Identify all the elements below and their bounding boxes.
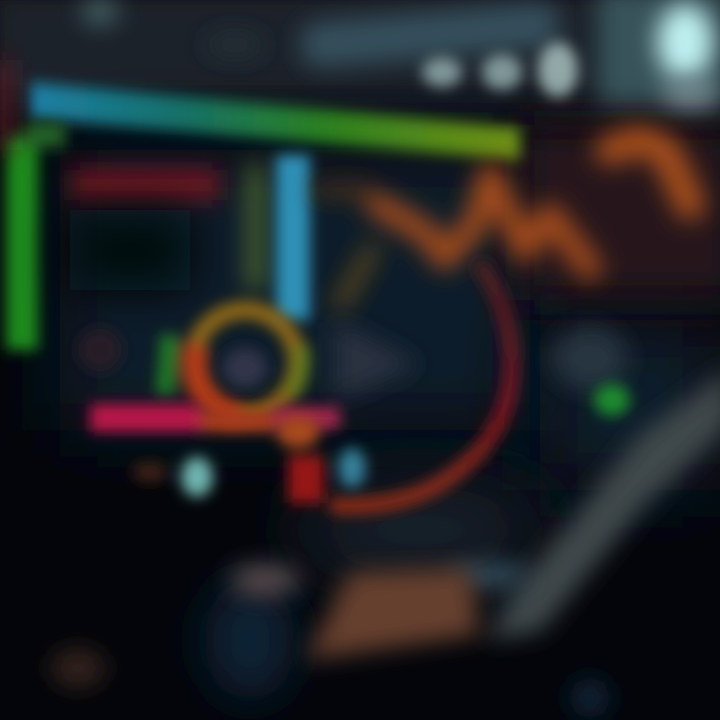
cyan vertical bar: [276, 155, 310, 320]
pink bar: [90, 404, 340, 432]
diagonal grey streak: [485, 368, 720, 640]
brown table: [305, 568, 480, 660]
panel: dark red chart backdrop: [520, 125, 720, 300]
blue floor spot: [570, 678, 610, 718]
red heading bar: [72, 170, 220, 200]
ring centre: [223, 348, 267, 388]
grey arrow shape: [335, 320, 420, 400]
tan smudge: [230, 564, 300, 596]
top blue-green bar: [30, 82, 520, 160]
small multicolour ring: [165, 310, 302, 415]
green marker: [594, 384, 630, 416]
ceiling lights: [82, 0, 720, 111]
left red edge: [0, 60, 12, 150]
large circular arc: [330, 262, 512, 506]
orange zigzag line chart: [320, 140, 690, 305]
right grey gauge: [552, 326, 628, 390]
cyan-grey reflection: [450, 563, 530, 587]
olive vertical bar: [247, 165, 265, 290]
lower marks: [78, 328, 366, 503]
brown floor spot: [50, 648, 106, 688]
left green bar: [6, 122, 65, 350]
dark navy panel: [70, 210, 190, 290]
